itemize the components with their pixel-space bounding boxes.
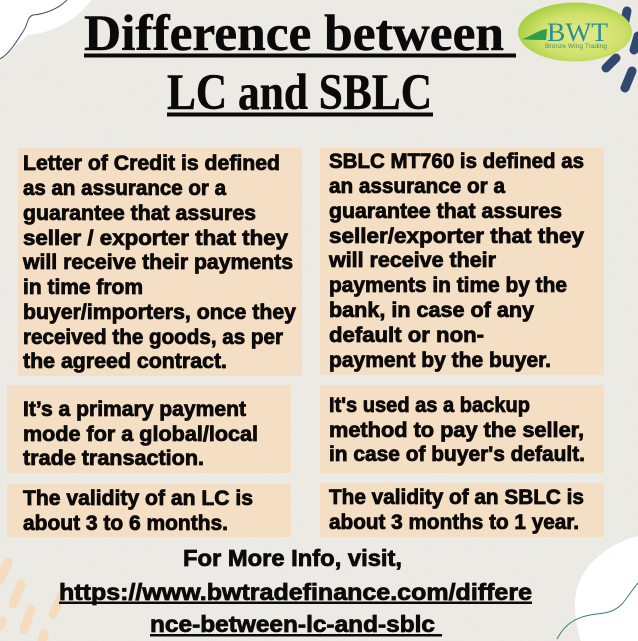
panel: LC definition [18, 148, 302, 376]
icon: green wing [522, 29, 547, 40]
panel: LC definition: guarantee that assures [23, 202, 256, 225]
panel: LC definition: the agreed contract. [23, 350, 227, 373]
panel: SBLC validity: about 3 months to 1 year. [329, 511, 579, 534]
decoration: top-left white blob [0, 0, 91, 60]
panel: SBLC definition: will receive their [328, 249, 496, 272]
panel: SBLC definition: an assurance or a [329, 175, 505, 198]
panel: LC definition: received the goods, as per [23, 326, 283, 349]
panel: SBLC definition: payments in time by the [329, 274, 567, 297]
panel: SBLC definition: payment by the buyer. [329, 349, 551, 372]
footer: more info link: https://www.bwtradefinance.com/differe [59, 579, 532, 605]
footer: more info link: For More Info, visit, [183, 545, 402, 571]
decoration: peach brush strokes [0, 562, 62, 641]
panel: LC primary payment mode: It’s a primary payment [23, 398, 246, 421]
decoration: bottom-right white blob [557, 536, 638, 641]
decoration: navy brush strokes [606, 11, 638, 88]
panel: SBLC definition [320, 148, 604, 375]
panel: LC primary payment mode [7, 385, 291, 473]
panel: LC definition: will receive their payments [22, 251, 293, 274]
panel: SBLC validity: The validity of an SBLC is [329, 486, 584, 509]
panel: LC definition: Letter of Credit is defined [23, 152, 280, 175]
panel: SBLC definition: SBLC MT760 is defined as [329, 150, 584, 173]
logo: Bronze Wing Trading [518, 2, 632, 62]
panel: LC definition: seller / exporter that they [23, 227, 288, 250]
panel: LC definition: in time from [23, 276, 143, 299]
logo: Bronze Wing Trading: BWT [547, 18, 608, 47]
panel: LC validity: about 3 to 6 months. [23, 512, 228, 535]
logo: Bronze Wing Trading: Bronze Wing Trading [545, 43, 607, 50]
panel: LC definition: as an assurance or a [23, 177, 226, 200]
panel: LC primary payment mode: mode for a global/local [23, 423, 258, 446]
panel: SBLC validity [320, 483, 604, 537]
panel: SBLC backup method [320, 385, 604, 473]
panel: SBLC definition: guarantee that assures [329, 200, 562, 223]
panel: SBLC definition: default or non- [329, 324, 484, 347]
panel: SBLC definition: seller/exporter that they [329, 225, 584, 248]
title [84, 6, 516, 121]
panel: SBLC backup method: method to pay the seller, [329, 419, 584, 442]
panel: LC definition: buyer/importers, once they [23, 301, 296, 324]
panel: LC validity [7, 484, 291, 537]
footer: more info link [59, 545, 532, 637]
panel: LC primary payment mode: trade transaction. [23, 447, 204, 470]
panel: SBLC backup method: It's used as a backup [329, 394, 530, 417]
footer: more info link: nce-between-lc-and-sblc [150, 611, 435, 637]
panel: SBLC definition: bank, in case of any [329, 299, 534, 322]
title: Difference between [84, 6, 504, 62]
panel: LC validity: The validity of an LC is [23, 487, 253, 510]
panel: SBLC backup method: in case of buyer's default. [329, 443, 585, 466]
title: LC and SBLC [167, 65, 432, 121]
